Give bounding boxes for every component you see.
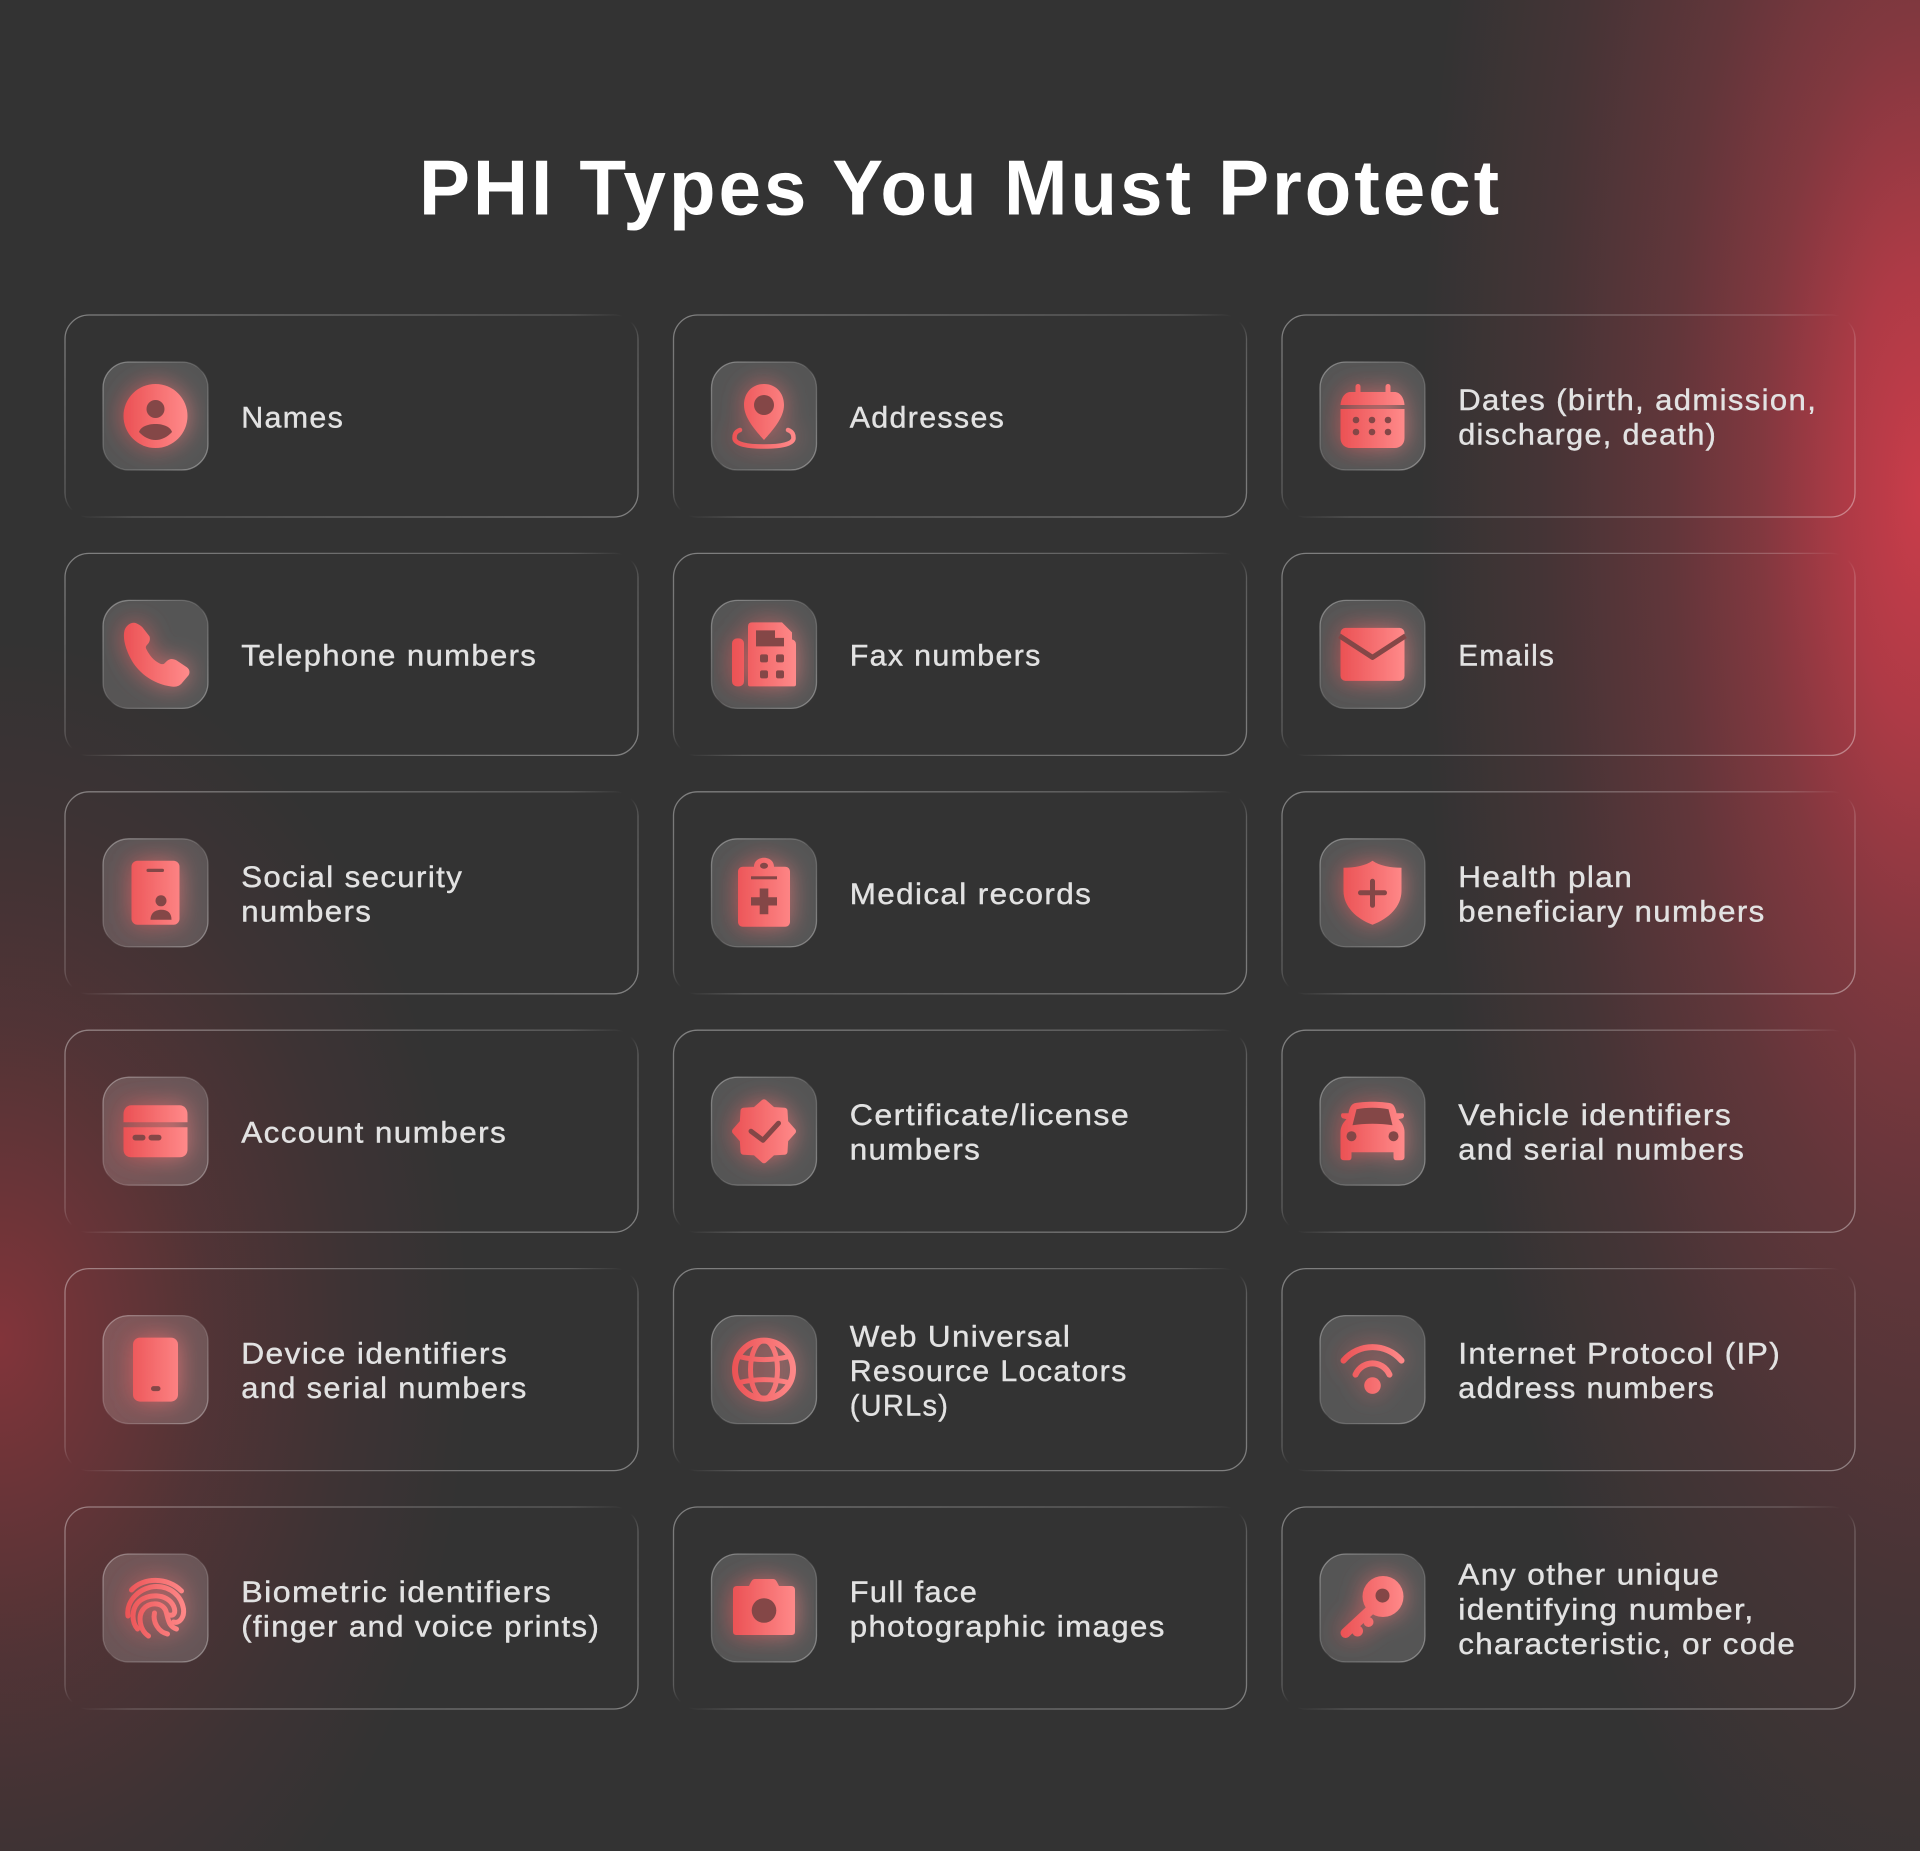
card: Biometric identifiers [65,1507,638,1709]
card: Dates [1282,315,1855,517]
icon: phone [124,623,190,687]
label: beneficiary numbers [1458,895,1766,928]
label: Emails [1458,640,1555,673]
label: photographic images [850,1610,1166,1644]
icon: car [1340,1102,1404,1160]
label: Internet Protocol (IP) [1458,1338,1781,1371]
label: Full face [850,1576,978,1609]
label: identifying number, [1458,1593,1755,1626]
card: Any other unique identifier [1282,1507,1855,1709]
card: Emails [1282,553,1855,755]
card: Health plan beneficiary numbers [1282,792,1855,994]
icon: location pin [734,384,794,446]
icon: verified badge [735,1102,793,1160]
label: Telephone numbers [241,640,537,673]
card: Addresses [674,315,1246,517]
icon: person [124,384,188,448]
label: Certificate/license [850,1099,1130,1132]
label: (URLs) [850,1390,949,1423]
label: Dates (birth, admission, [1458,384,1817,417]
label: Device identifiers [241,1338,508,1371]
label: and serial numbers [1458,1134,1745,1167]
label: (finger and voice prints) [241,1610,600,1644]
label: discharge, death) [1458,418,1717,452]
label: address numbers [1458,1372,1715,1405]
label: characteristic, or code [1458,1628,1796,1661]
label: Any other unique [1458,1559,1720,1592]
label: Health plan [1458,861,1633,894]
label: and serial numbers [241,1372,528,1405]
card: Medical records [674,792,1246,994]
card: Full face images [674,1507,1246,1709]
label: Names [241,401,344,434]
icon: wifi [1344,1347,1402,1394]
label: Vehicle identifiers [1458,1099,1732,1132]
icon: calendar [1340,384,1404,448]
card: Certificate/license numbers [674,1030,1246,1232]
icon: medical clipboard [738,858,790,927]
card: Telephone numbers [65,553,638,755]
card: Device identifiers [65,1269,638,1471]
icon: id card [132,861,180,925]
label: numbers [241,895,372,928]
icon: fax [732,622,796,686]
icon: camera [733,1579,795,1635]
label: Addresses [850,401,1005,434]
icon: envelope [1340,628,1406,681]
label: Social security [241,861,463,894]
card: Account numbers [65,1030,638,1232]
icon: credit card [124,1105,188,1157]
icon: device [133,1338,178,1402]
card: Names [65,315,638,517]
label: numbers [850,1134,981,1167]
label: Biometric identifiers [241,1576,552,1609]
label: Medical records [850,878,1092,911]
card: Social security numbers [65,792,638,994]
title: PHI Types You Must Protect [419,144,1502,232]
card: Fax numbers [674,553,1246,755]
icon: globe [735,1341,793,1399]
icon: shield [1344,861,1402,925]
icon: key [1346,1576,1404,1636]
icon: fingerprint [128,1580,184,1636]
label: Web Universal [850,1320,1071,1353]
label: Fax numbers [850,640,1042,673]
label: Account numbers [241,1116,507,1150]
card: Internet Protocol [1282,1269,1855,1471]
card: Web URLs [674,1269,1246,1471]
card: Vehicle identifiers [1282,1030,1855,1232]
label: Resource Locators [850,1355,1128,1388]
